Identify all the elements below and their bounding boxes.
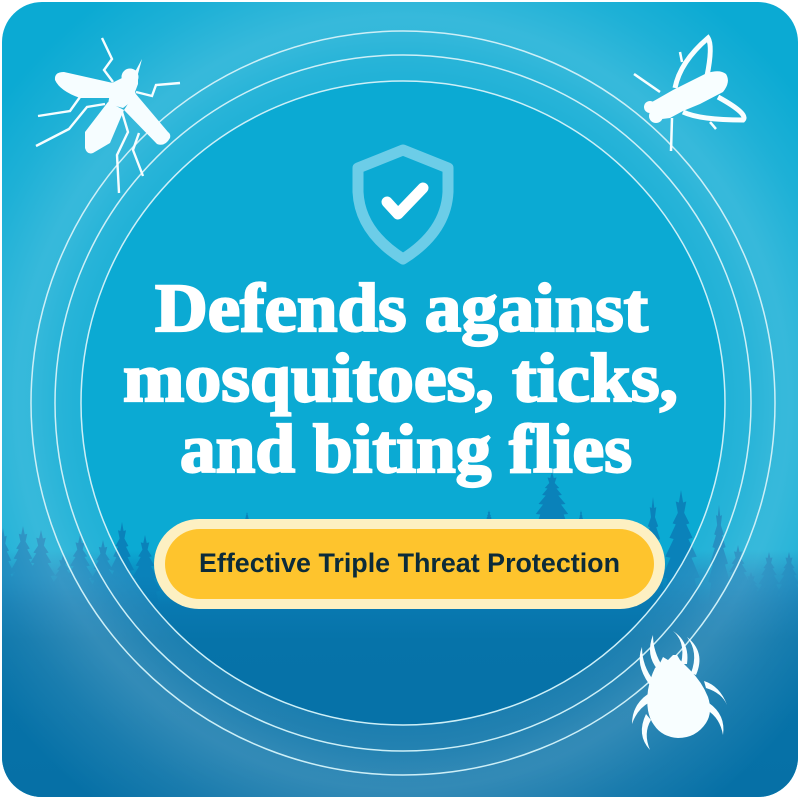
icon: fly xyxy=(634,38,744,151)
title xyxy=(123,270,678,487)
callout text: Effective Triple Threat Protection xyxy=(199,548,620,578)
title: Defends against xyxy=(155,270,648,346)
icon: mosquito xyxy=(36,38,180,193)
callout pill xyxy=(154,519,665,609)
icon: tick xyxy=(632,631,727,750)
icon: shield with check xyxy=(358,150,448,259)
title: and biting flies xyxy=(180,411,632,487)
ground band xyxy=(0,550,800,800)
title: mosquitoes, ticks, xyxy=(123,340,678,416)
forest silhouette xyxy=(2,473,796,581)
